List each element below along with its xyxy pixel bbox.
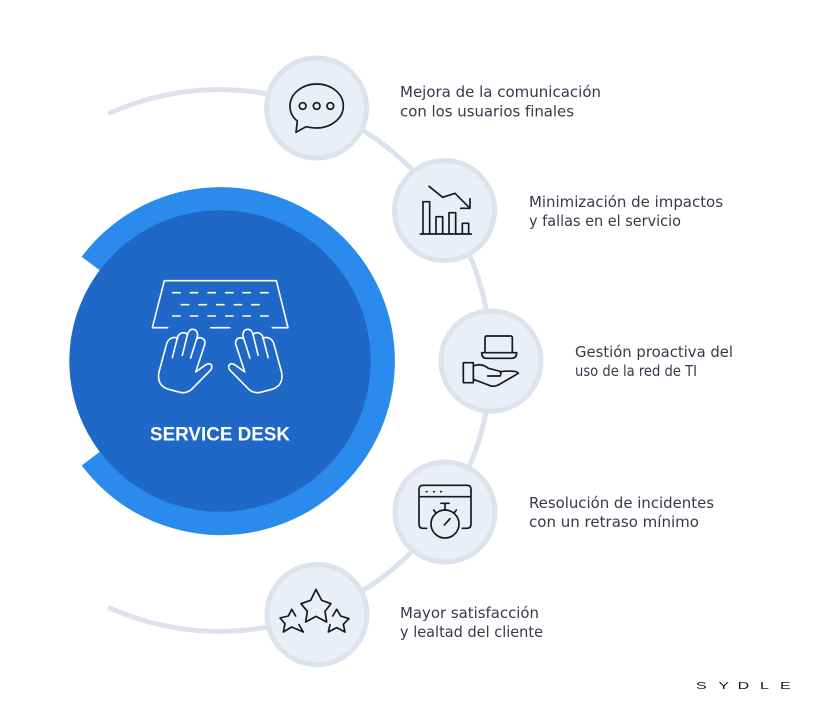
icon: keyboard and hands bbox=[152, 281, 288, 393]
text bbox=[529, 193, 723, 230]
text: y fallas en el servicio bbox=[529, 212, 681, 230]
icon: falling bar chart bbox=[420, 186, 471, 234]
node circle bbox=[266, 58, 366, 158]
node 2: impact minimisation bbox=[394, 160, 723, 260]
text: con un retraso mínimo bbox=[529, 513, 699, 531]
node circle bbox=[395, 462, 495, 562]
icon: speech bubble bbox=[290, 84, 343, 132]
connecting arc bbox=[110, 90, 491, 631]
text bbox=[400, 604, 543, 641]
node 3: proactive management bbox=[441, 311, 733, 411]
text: Mejora de la comunicación bbox=[400, 83, 601, 101]
text bbox=[575, 343, 733, 380]
text: Resolución de incidentes bbox=[529, 494, 714, 512]
icon: three stars bbox=[280, 589, 349, 632]
logo: sydle: SYDLE bbox=[696, 680, 791, 691]
text: con los usuarios finales bbox=[400, 102, 574, 120]
icon: window with stopwatch bbox=[419, 485, 471, 538]
text bbox=[529, 494, 714, 531]
outer notched ring bbox=[82, 187, 395, 535]
text: Minimización de impactos bbox=[529, 193, 723, 211]
node 5: customer satisfaction bbox=[267, 564, 543, 664]
text: Mayor satisfacción bbox=[400, 604, 539, 622]
text bbox=[400, 83, 601, 120]
text: y lealtad del cliente bbox=[400, 623, 543, 641]
text: uso de la red de TI bbox=[575, 362, 697, 380]
node circle bbox=[441, 311, 541, 411]
keyboard bbox=[152, 281, 288, 328]
central service desk circle bbox=[69, 187, 395, 535]
label: service desk: SERVICE DESK bbox=[150, 424, 290, 446]
text: Gestión proactiva del bbox=[575, 343, 733, 361]
right hand bbox=[229, 329, 282, 393]
node 4: incident resolution bbox=[395, 462, 714, 562]
left hand bbox=[159, 329, 212, 393]
inner circle bbox=[69, 210, 371, 512]
node circle bbox=[267, 564, 367, 664]
node 1: communication bbox=[266, 58, 601, 158]
node circle bbox=[394, 160, 494, 260]
icon: hand holding laptop bbox=[463, 336, 518, 386]
